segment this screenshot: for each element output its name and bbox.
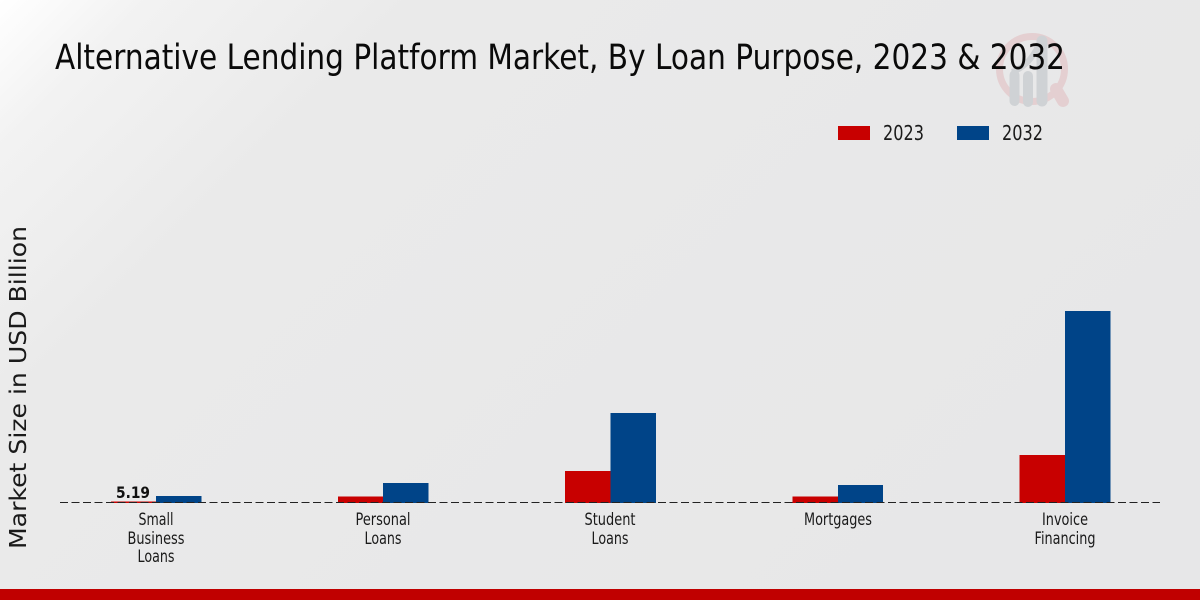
bars: Mortgages [792,485,883,503]
category label: Personal Loans [356,510,410,548]
legend swatch: 2032 [957,126,989,140]
bars: Small Business Loans [111,496,202,503]
category label: Student Loans [584,510,636,548]
category label: Small Business Loans [128,510,184,566]
data label: 5.19: 5.19 [116,483,150,502]
category label: Student Loans: Loans [592,529,628,548]
category label: Mortgages: Mortgages [804,510,872,529]
y axis label: Market Size in USD Billion [4,226,32,549]
category label: Invoice Financing: Financing [1034,529,1096,548]
bars: Invoice Financing [1020,311,1110,503]
legend label: 2032: 2032 [1002,121,1043,145]
category label: Personal Loans: Personal [356,510,410,529]
category label: Student Loans: Student [584,510,636,529]
legend [838,121,1043,145]
category label: Personal Loans: Loans [364,529,402,548]
category label: Small Business Loans: Loans [138,547,174,566]
bars: Personal Loans [338,483,428,503]
axis baseline [60,502,1160,504]
title: Alternative Lending Platform Market, By Loan Purpose, 2023 & 2032 [55,38,1065,78]
category label: Small Business Loans: Business [128,529,184,548]
category label: Invoice Financing [1034,510,1096,548]
legend label: 2023: 2023 [883,121,924,145]
legend swatch: 2023 [838,126,870,140]
footer bar [0,589,1200,600]
icon: watermark logo [1000,36,1064,102]
category label: Small Business Loans: Small [138,510,174,529]
bars: Student Loans [565,413,656,503]
category label: Invoice Financing: Invoice [1042,510,1088,529]
bar chart [60,311,1160,566]
